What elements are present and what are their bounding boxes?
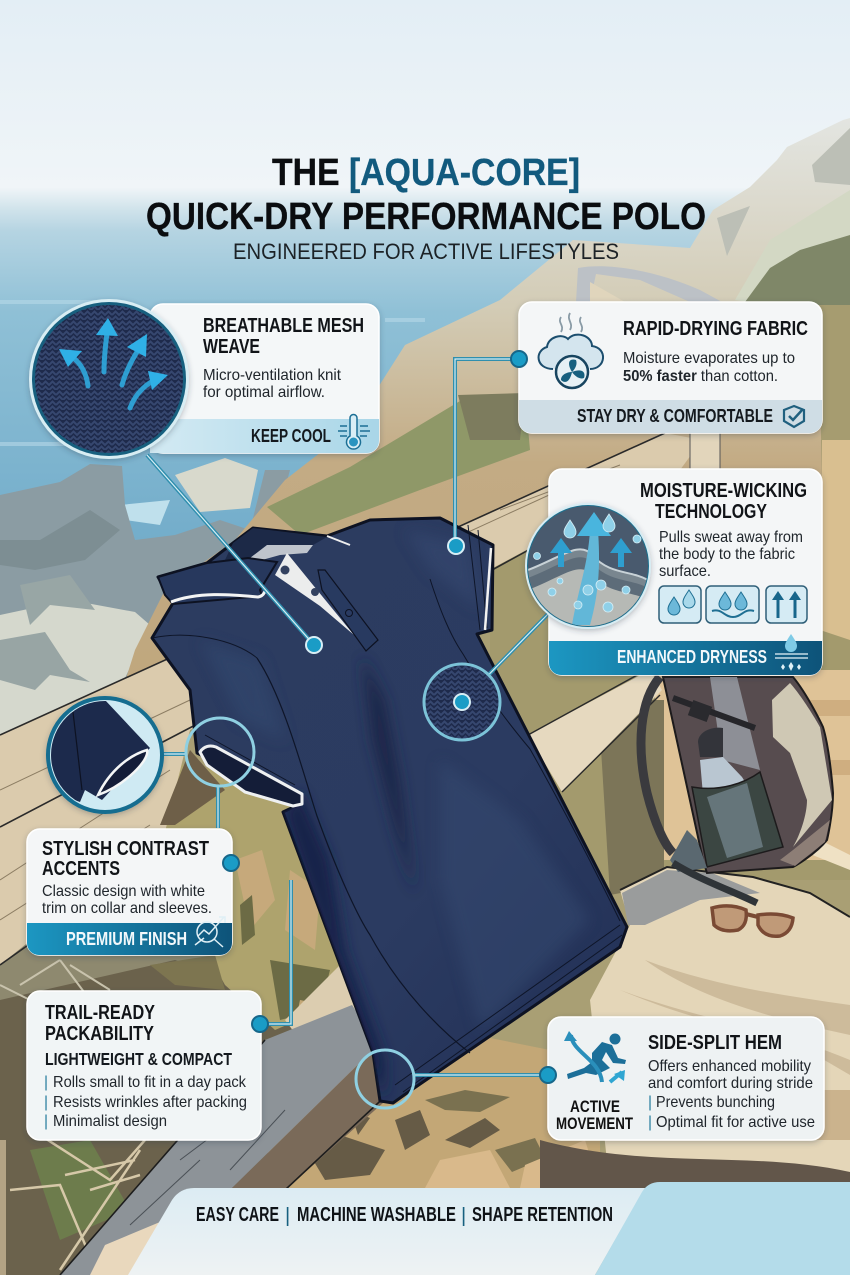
icon: thermometer with airflow bbox=[338, 414, 370, 449]
zoom ring: sleeve cuff bbox=[186, 718, 254, 786]
panel: moisture-wicking technology: the body to the fabric bbox=[659, 546, 795, 563]
icon: fabric magnifier with airflow arrows bbox=[29, 299, 189, 459]
icon: shield check bbox=[784, 406, 804, 427]
panel: moisture-wicking technology: surface. bbox=[659, 563, 711, 580]
panel: stylish contrast accents: PREMIUM FINISH bbox=[66, 928, 187, 949]
panel: rapid-drying fabric: STAY DRY & COMFORTABLE bbox=[577, 405, 773, 426]
panel: side-split hem: Offers enhanced mobility bbox=[648, 1058, 811, 1075]
title: QUICK-DRY PERFORMANCE POLO bbox=[146, 196, 706, 238]
title bbox=[146, 152, 706, 264]
panel: side-split hem: | bbox=[648, 1114, 652, 1131]
distant boardwalk bbox=[576, 266, 722, 302]
panel: rapid-drying fabric bbox=[519, 302, 822, 433]
white sleeve trim bbox=[200, 746, 302, 806]
panel: side-split hem: ACTIVE bbox=[570, 1097, 620, 1116]
panel: trail-ready packability: | bbox=[44, 1113, 48, 1130]
panel: breathable mesh weave bbox=[150, 304, 379, 453]
bottom banner: | bbox=[461, 1205, 466, 1227]
rock bbox=[590, 867, 850, 1190]
panel: trail-ready packability: | bbox=[44, 1094, 48, 1111]
icon: two droplets bbox=[659, 586, 701, 623]
icon: moisture wicking cross-section bbox=[526, 504, 650, 630]
left rocks bbox=[0, 464, 290, 800]
wooden rail bbox=[0, 433, 702, 965]
panel: stylish contrast accents: Classic design with white bbox=[42, 883, 205, 900]
placket bbox=[275, 553, 354, 635]
panel: stylish contrast accents: STYLISH CONTRAST bbox=[42, 838, 209, 860]
zoom ring: side split hem bbox=[356, 1050, 414, 1108]
title: THE [AQUA-CORE] bbox=[272, 152, 580, 194]
panel: moisture-wicking technology: Pulls sweat away from bbox=[659, 529, 803, 546]
panel: trail-ready packability: Resists wrinkles after packing bbox=[53, 1094, 247, 1111]
panel: stylish contrast accents: trim on collar and sleeves. bbox=[42, 900, 212, 917]
icon: upward arrows bbox=[766, 586, 807, 623]
bottom banner: SHAPE RETENTION bbox=[472, 1204, 613, 1226]
icon: runner with movement arrows bbox=[564, 1031, 626, 1082]
panel: side-split hem bbox=[548, 1017, 824, 1140]
shrub ground bbox=[490, 520, 850, 880]
panel: trail-ready packability: Rolls small to fit in a day pack bbox=[53, 1074, 247, 1091]
panel: moisture-wicking technology: MOISTURE-WICKING bbox=[640, 480, 807, 502]
panel: side-split hem: SIDE-SPLIT HEM bbox=[648, 1032, 782, 1054]
polo shirt bbox=[152, 518, 627, 1103]
backpack with water bottle bbox=[641, 677, 833, 903]
panel: rapid-drying fabric: 50% faster than cotton. bbox=[623, 368, 778, 385]
panel: side-split hem: | bbox=[648, 1094, 652, 1111]
icon: magnifier with rising arrow bbox=[195, 917, 225, 947]
panel: rapid-drying fabric: RAPID-DRYING FABRIC bbox=[623, 318, 808, 340]
panel: breathable mesh weave: for optimal airflow. bbox=[203, 384, 325, 401]
title: ENGINEERED FOR ACTIVE LIFESTYLES bbox=[233, 239, 619, 264]
panel: stylish contrast accents bbox=[27, 829, 232, 955]
panel: moisture-wicking technology bbox=[549, 469, 822, 675]
panel: side-split hem: Optimal fit for active use bbox=[656, 1114, 815, 1131]
panel: side-split hem: and comfort during stride bbox=[648, 1075, 813, 1092]
panel: trail-ready packability: TRAIL-READY bbox=[45, 1002, 156, 1024]
panel: moisture-wicking technology: ENHANCED DRYNESS bbox=[617, 646, 767, 667]
leader lines bbox=[147, 359, 550, 1075]
collar bbox=[225, 528, 327, 560]
panel: trail-ready packability: LIGHTWEIGHT & COMPACT bbox=[45, 1049, 232, 1069]
panel: trail-ready packability: Minimalist design bbox=[53, 1113, 167, 1130]
sunglasses bbox=[712, 906, 793, 936]
connector dots bbox=[223, 351, 556, 1083]
bottom banner bbox=[90, 1182, 850, 1275]
icon: cloud with fan bbox=[539, 313, 603, 388]
panel: trail-ready packability: | bbox=[44, 1074, 48, 1091]
bottom banner: MACHINE WASHABLE bbox=[297, 1204, 456, 1226]
panel: breathable mesh weave: KEEP COOL bbox=[251, 425, 331, 446]
panel: moisture-wicking technology: TECHNOLOGY bbox=[655, 501, 768, 523]
bottom banner: | bbox=[285, 1205, 290, 1227]
icon: drops over fabric line bbox=[775, 634, 808, 671]
panel: breathable mesh weave: WEAVE bbox=[203, 336, 260, 358]
icon: droplets on wave bbox=[706, 586, 759, 623]
panel: stylish contrast accents: ACCENTS bbox=[42, 858, 120, 880]
panel: breathable mesh weave: BREATHABLE MESH bbox=[203, 315, 364, 337]
panel: breathable mesh weave: Micro-ventilation knit bbox=[203, 367, 342, 384]
bottom banner: EASY CARE bbox=[196, 1204, 279, 1226]
panel: rapid-drying fabric: Moisture evaporates up to bbox=[623, 350, 795, 367]
icon: sleeve cuff close-up bbox=[45, 698, 162, 812]
panel: side-split hem: MOVEMENT bbox=[556, 1114, 633, 1133]
panel: side-split hem: Prevents bunching bbox=[656, 1094, 775, 1111]
far hills bbox=[105, 118, 850, 745]
panel: trail-ready packability: PACKABILITY bbox=[45, 1023, 155, 1045]
panel: trail-ready packability bbox=[27, 991, 261, 1140]
zoom ring: mesh patch on shirt bbox=[424, 664, 500, 740]
